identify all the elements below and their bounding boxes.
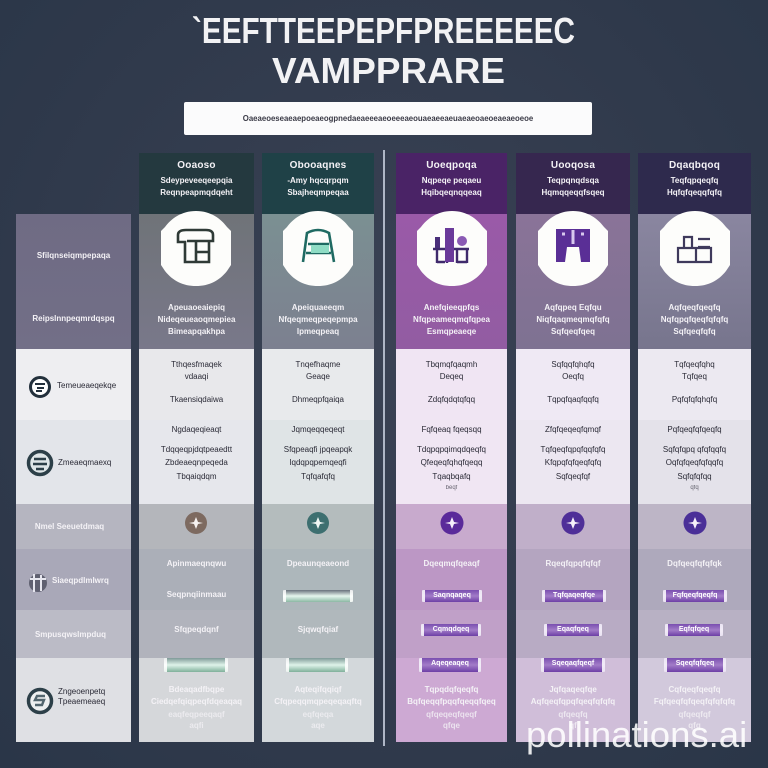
panel: column 4: Sqfqeqfqf xyxy=(556,472,590,481)
panel: column 5: qfqeqfqf xyxy=(678,710,710,719)
panel: column 1: Nideqeueaoqmepiea xyxy=(158,315,235,324)
panel: column 4: Hqmqqeqqfsqeq xyxy=(541,188,605,197)
panel: row labels: Smpusqwslmpduq xyxy=(35,630,106,639)
panel: column 1: vdaaqi xyxy=(185,372,208,381)
panel: column 2: Dhmeqpfqaiqa xyxy=(292,395,344,404)
icon: row 8 badge xyxy=(26,688,54,714)
panel: column 2: Jqmqeqqeqeqt xyxy=(292,425,344,434)
panel: column 3: qfqeqeqfqeqf xyxy=(426,710,477,719)
badge: column 4 bar A xyxy=(542,590,606,602)
panel: column 4: Jqfqaqeqfqe xyxy=(549,685,597,694)
badge: column 4 bar B xyxy=(544,624,602,636)
panel: row labels: Temeueaeqekqe xyxy=(57,381,116,390)
panel: column 1: eaqfeqpeeqaqf xyxy=(168,710,225,719)
badge: column 5 bar C: Sqeqfqfqeq xyxy=(676,660,714,667)
panel: column 2: Tqfqafqfq xyxy=(301,472,335,481)
badge: column 3 bar A xyxy=(422,590,482,602)
panel: column 5: Aqfqeqfqeqfq xyxy=(668,303,720,312)
panel: column 4: Teqpqnqdsqa xyxy=(547,176,599,185)
panel: column 2: Aqteqifqqiqf xyxy=(294,685,342,694)
panel: column 4: Zfqfqeqeqfqmqf xyxy=(545,425,601,434)
panel: column 1: aqfi xyxy=(189,721,204,730)
panel: column 2: Geaqe xyxy=(306,372,330,381)
panel: column 5: Tqfqeq xyxy=(682,372,707,381)
badge: column 3 bar B xyxy=(421,624,481,636)
panel: column 3: Bqfqeqqfpqqfqeqqfqeq xyxy=(407,697,496,706)
icon: column 4 emblem xyxy=(538,211,608,286)
panel: column 4: Tqfqeqfqpqfqqfqfq xyxy=(541,445,605,454)
panel: column 5: Teqfqpqeqfq xyxy=(671,176,718,185)
badge: column 5 bar A xyxy=(663,590,727,602)
panel: column 5: Pqfqfqfqhqfq xyxy=(672,395,717,404)
panel: column 1: Sdeypeveeqeepqia xyxy=(160,176,233,185)
panel: column 2: Tnqefhaqme xyxy=(296,360,340,369)
icon: column 4 marker xyxy=(562,512,584,534)
panel: row labels xyxy=(16,214,131,742)
panel: column 4: Niqfqaqmeqmqfqfq xyxy=(536,315,610,324)
panel: column 5: qfq xyxy=(688,721,701,730)
panel: column 1: Sfqpeqdqnf xyxy=(174,625,219,634)
panel: column 1: Zbdeaeqnpeqeda xyxy=(165,458,228,467)
panel: column 4: Sqfqeqfqeq xyxy=(551,327,595,336)
panel: column 2: Iqdqpqpemqeqfi xyxy=(289,458,347,467)
badge: column 5 bar B xyxy=(665,624,723,636)
badge: column 3 bar C xyxy=(419,658,481,672)
panel: column 3 xyxy=(396,153,507,742)
panel: column 5: Oqfqfqeqfqfqqfq xyxy=(666,458,723,467)
watermark: pollinations.ai xyxy=(526,714,747,755)
panel: column 3: Nqpeqe peqaeu xyxy=(422,176,481,185)
panel: column 5: Cqfqeqfqeqfq xyxy=(668,685,720,694)
icon: column 5 emblem xyxy=(660,211,730,286)
panel: column 2: Cfqpeqqmqpeqeqaqftq xyxy=(274,697,362,706)
panel: column 5 xyxy=(638,153,751,742)
panel: column 3: Anefqieeqpfqs xyxy=(424,303,479,312)
badge: column 4 bar C xyxy=(541,658,605,672)
panel: column 3: Fqfqeaq fqeqsqq xyxy=(421,425,482,434)
panel: column 1: Tkaensiqdaiwa xyxy=(170,395,223,404)
panel: column 2: Apeiquaeeqm xyxy=(292,303,344,312)
title: VAMPPRARE xyxy=(272,50,505,91)
icon: row 4 badge xyxy=(26,450,54,476)
panel: column 5: Hqfqfqeqqfqfq xyxy=(667,188,722,197)
panel: column 4: Tqpqfqaqfqqfq xyxy=(547,395,599,404)
panel: column 2 xyxy=(262,153,374,742)
panel: column 2: Sbajheqmpeqaa xyxy=(287,188,349,197)
panel: column 1: Tbqaiqdqm xyxy=(176,472,217,481)
panel: column 5: Tqfqeqfqhq xyxy=(674,360,715,369)
panel: column 1: Apinmaeqnqwu xyxy=(167,559,226,568)
panel: row labels: Tpeaemeaeq xyxy=(58,697,105,706)
panel: column 1: Reqnpeapmqdqeht xyxy=(160,188,233,197)
badge: column 1 bar xyxy=(164,658,228,672)
panel: column 1: Bdeaqadfbqpe xyxy=(169,685,224,694)
panel: row labels: Sfilqnseiqmpepaqa xyxy=(37,251,110,260)
icon: column 3 marker xyxy=(440,512,464,534)
panel: row labels: Zngeoenpetq xyxy=(58,687,105,696)
badge: column 3 bar A: Saqnqaqeq xyxy=(433,592,471,599)
badge: column 3 bar B: Cqmqdqeq xyxy=(433,626,469,633)
panel: column 3: Tqaqbqafq xyxy=(432,472,471,481)
panel: column 5: Sqfqeqfqfq xyxy=(673,327,716,336)
badge: column 3 bar C: Aqeqeaqeq xyxy=(431,660,469,667)
panel: column 2: Nfqeqmeqpeqepmpa xyxy=(278,315,358,324)
panel: row labels: Siaeqpdlmlwrq xyxy=(52,576,109,585)
icon: column 3 emblem xyxy=(417,211,487,286)
panel: column 3: Tqpqdqfqeqfq xyxy=(425,685,478,694)
panel: column 1: Apeuaoeaiepiq xyxy=(168,303,225,312)
panel: column 1: Tdqqeqpjdqtpeaedtt xyxy=(161,445,232,454)
panel: column 4: Kfqpqfqfqeqfqfq xyxy=(545,458,601,467)
panel: column 2: aqe xyxy=(311,721,325,730)
title xyxy=(192,10,575,91)
icon: column 1 emblem xyxy=(161,211,231,286)
panel: column 5: Sqfqfqfqq xyxy=(677,472,712,481)
panel: column 4: Aqfqpeq Eqfqu xyxy=(544,303,602,312)
badge: column 4 bar C: Sqeqaqfqeqf xyxy=(552,660,594,667)
panel: column 3: Tbqmqfqaqmh xyxy=(426,360,477,369)
icon: column 1 marker xyxy=(185,512,207,534)
panel: column 4 xyxy=(516,153,630,742)
panel: column 2: eqfqeqa xyxy=(303,710,333,719)
panel: column 1: Tthqesfmaqek xyxy=(171,360,222,369)
panel: column 5: Pqfqeqfqfqeqfq xyxy=(667,425,722,434)
divider between column groups xyxy=(383,150,385,746)
panel: column 5: qfq xyxy=(690,485,699,491)
panel: column 3: qfqe xyxy=(443,721,460,730)
panel: column 2: Sfqpeaqfi jpqeapqk xyxy=(284,445,352,454)
subtitle banner xyxy=(184,102,592,135)
icon: column 2 marker xyxy=(307,512,329,534)
panel: column 3: beqf xyxy=(446,485,457,491)
icon: row 3 badge xyxy=(29,376,51,398)
panel: column 4: Rqeqfqpqfqfqf xyxy=(545,559,601,568)
panel: column 4: Oeqfq xyxy=(562,372,584,381)
panel: column 3: Dqeqmqfqeaqf xyxy=(424,559,480,568)
panel: column 1: Ciedqefqiqpeqfdqeaqaq xyxy=(151,697,242,706)
badge: column 2 bar A xyxy=(283,590,353,602)
panel: row labels: Reipslnnpeqmrdqspq xyxy=(32,314,115,323)
panel: column 5: Fqfqeqfqfqeqfqfqfqfq xyxy=(654,697,735,706)
panel: column 2: -Amy hqcqrpqm xyxy=(287,176,349,185)
badge: column 5 bar A: Fqfqeqfqeqfq xyxy=(673,592,717,599)
badge: column 4 bar B: Eqaqfqeq xyxy=(557,626,589,633)
title: `EEFTTEEPEPFPREEEEEC xyxy=(192,10,575,51)
panel: column 5: Sqfqfqpq qfqfqqfq xyxy=(663,445,726,454)
panel: column 4: Sqfqqfqhqfq xyxy=(551,360,595,369)
panel: column 4: Aqfqeqfqpqfqeqfqfqfq xyxy=(531,697,615,706)
icon: column 5 marker xyxy=(684,512,706,534)
badge: column 5 bar B: Eqfqfqeq xyxy=(679,626,709,633)
panel: row labels: Nmel Seeuetdmaq xyxy=(35,522,104,531)
panel: column 2: Sjqwqfqiaf xyxy=(298,625,338,634)
panel: column 3: Hqibqeqnqqeaq xyxy=(421,188,482,197)
panel: column 3: Deqeq xyxy=(440,372,463,381)
panel: column 1: Seqpnqiinmaau xyxy=(167,590,226,599)
panel: column 3: Nfqpeameqmqfqpea xyxy=(413,315,490,324)
panel: column 4: qfqeqfq xyxy=(558,710,588,719)
panel: column 3: Qfeqeqfqhqfqeqq xyxy=(421,458,482,467)
panel: row labels: Zmeaeqmaexq xyxy=(58,458,111,467)
panel: column 3: Zdqfqdqtqfqq xyxy=(428,395,475,404)
badge: column 2 bar B xyxy=(286,658,348,672)
icon: column 2 emblem xyxy=(283,211,353,286)
icon: row 6 badge xyxy=(29,574,47,592)
panel: column 2: Dpeaunqeaeond xyxy=(287,559,349,568)
panel: column 5: Dqfqeqfqfqfqk xyxy=(667,559,722,568)
badge: column 4 bar A: Tqfqaqeqfqe xyxy=(553,592,595,599)
panel: column 4: qf xyxy=(569,721,577,730)
panel: column 1 xyxy=(139,153,254,742)
panel: column 3: Esmqpeaeqe xyxy=(427,327,476,336)
panel: column 2: Ipmeqpeaq xyxy=(297,327,339,336)
panel: column 1: Ngdaqeqieaqt xyxy=(172,425,221,434)
badge: column 5 bar C xyxy=(664,658,726,672)
panel: column 1: Bimeapqakhpa xyxy=(168,327,225,336)
panel: column 5: Nqfqpqfqeqfqfqfq xyxy=(661,315,728,324)
panel: column 3: Tdqpqpqimqdqeqfq xyxy=(417,445,486,454)
subtitle banner: Oaeaeoeseaeaepoeaeogpnedaeaeeeaeoeeeaeouaeaeeaeuaeaeoaeoeaeaeoeoe xyxy=(243,114,533,123)
